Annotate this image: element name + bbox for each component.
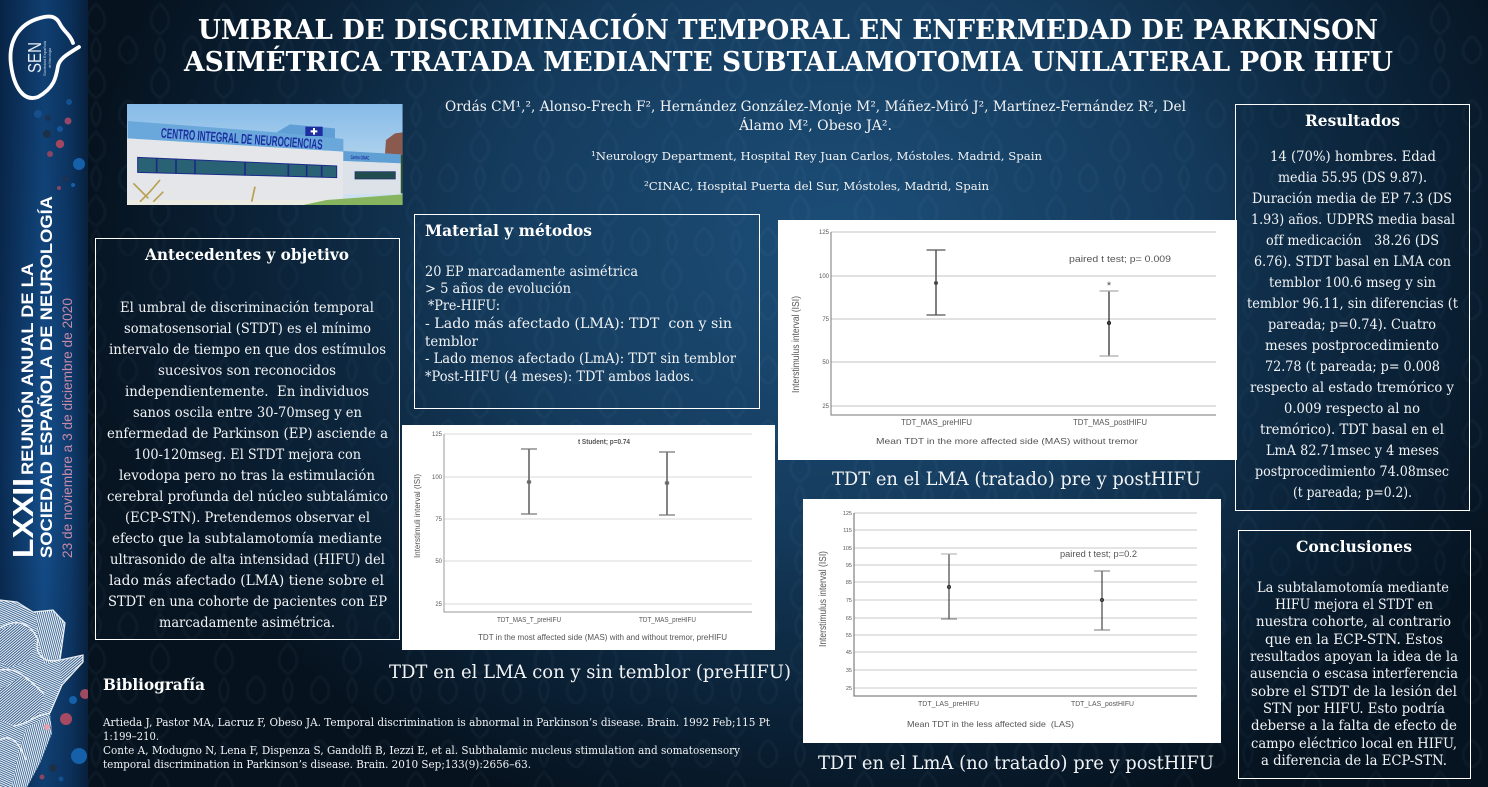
chart: TDT in less affected side: 25	[846, 686, 852, 692]
title	[183, 12, 1393, 78]
text block: references: Conte A, Modugno N, Lena F, Dispenza S, Gandolfi B, Iezzi E, et al. Subthalamic nucleus stimulation and somatosensory	[103, 743, 740, 757]
text block: conclusions: a diferencia de la ECP-STN.	[1261, 753, 1447, 769]
chart: TDT in most affected side with and without tremor: 25	[435, 602, 443, 608]
text block: results: off medicación 38.26 (DS	[1266, 233, 1439, 249]
congress title vertical: REUNIÓN ANUAL DE LA	[18, 263, 37, 475]
text block: methods: *Pre-HIFU:	[428, 298, 500, 314]
chart: TDT in less affected side: TDT_LAS_postHIFU	[1071, 699, 1134, 708]
text block: conclusions: que en la ECP-STN. Estos	[1265, 632, 1443, 648]
text block: results: postprocedimiento 74.08msec	[1255, 464, 1449, 480]
affiliations: ¹Neurology Department, Hospital Rey Juan Carlos, Móstoles. Madrid, Spain	[591, 149, 1043, 163]
chart: TDT in more affected side pre and post HIFU: 25	[822, 404, 830, 410]
chart: TDT in less affected side: 85	[846, 580, 852, 586]
error bar: postHIFU	[1100, 291, 1118, 356]
text block: conclusions	[1250, 580, 1458, 769]
icon: brain	[0, 600, 83, 787]
chart: TDT in most affected side with and without tremor: TDT_MAS_T_preHIFU	[497, 617, 561, 624]
text block: background	[107, 300, 388, 631]
icon: SEN logo: Sociedad Española	[42, 40, 47, 76]
chart: TDT in less affected side: paired t test; p=0.2	[1060, 549, 1137, 559]
text block: background: 100-120mseg. El STDT mejora con	[134, 447, 361, 463]
heading: Antecedentes y objetivo: Antecedentes y objetivo	[144, 245, 349, 264]
chart: TDT in less affected side	[803, 499, 1221, 743]
icon: SEN logo: de Neurología	[47, 47, 52, 68]
chart: TDT in more affected side pre and post HIFU: 125	[819, 230, 830, 236]
text block: methods	[425, 264, 737, 385]
chart: TDT in less affected side: 125	[843, 511, 852, 517]
text block: background: sucesivos son reconocidos	[158, 363, 336, 379]
text block: conclusions: ausencia o escasa interferencia	[1250, 666, 1458, 682]
chart: TDT in more affected side pre and post HIFU: Mean TDT in the more affected side (MAS) without tremor	[876, 436, 1138, 446]
chart: TDT in most affected side with and without tremor: TDT_MAS_preHIFU	[639, 617, 696, 624]
text block: background: El umbral de discriminación temporal	[120, 300, 374, 316]
text block: results: LmA 82.71msec y 4 meses	[1266, 443, 1439, 459]
chart: TDT in less affected side: 105	[843, 546, 852, 552]
chart: TDT in less affected side: Interstimulus interval (ISI)	[818, 551, 829, 647]
chart: TDT in more affected side pre and post HIFU	[778, 220, 1237, 460]
chart: TDT in more affected side pre and post HIFU: 75	[822, 317, 830, 323]
text block: background: independientemente. En individuos	[125, 384, 369, 400]
text block: methods: 20 EP marcadamente asimétrica	[425, 264, 638, 280]
text block: conclusions: campo eléctrico local en HIFU,	[1251, 736, 1457, 752]
text block: results	[1247, 149, 1459, 501]
network dots bottom	[40, 689, 90, 782]
chart: TDT in more affected side pre and post HIFU: 100	[819, 274, 830, 280]
chart: TDT in less affected side: 95	[846, 563, 852, 569]
chart: TDT in less affected side: 115	[843, 528, 852, 534]
text block: methods: > 5 años de evolución	[425, 281, 571, 297]
text block: results: 14 (70%) hombres. Edad	[1270, 149, 1436, 165]
text block: background: intervalo de tiempo en que dos estímulos	[109, 342, 386, 358]
chart: TDT in less affected side: TDT_LAS_preHIFU	[918, 699, 979, 708]
chart: TDT in more affected side pre and post HIFU: Interstimulus interval (ISI)	[791, 296, 802, 393]
text block: methods: - Lado menos afectado (LmA): TDT sin temblor	[425, 351, 737, 367]
text block: references: Artieda J, Pastor MA, Lacruz F, Obeso JA. Temporal discrimination is abnormal in Parkinson’s disease. Brain. 1992 Feb;115 Pt	[102, 715, 770, 729]
panel: Antecedentes y objetivo	[96, 238, 400, 640]
text block: results: Duración media de EP 7.3 (DS	[1252, 191, 1452, 207]
text block: conclusions: nuestra cohorte, al contrario	[1256, 614, 1451, 630]
text block: methods: - Lado más afectado (LMA): TDT con y sin	[425, 316, 732, 332]
chart: TDT in more affected side pre and post HIFU: paired t test; p= 0.009	[1069, 254, 1171, 265]
text block: results: 1.93) años. UDPRS media basal	[1251, 212, 1455, 228]
icon: SEN logo: SEN	[25, 42, 45, 73]
text block: conclusions: sobre el STDT de la lesión del	[1251, 684, 1457, 700]
text block: background: cerebral profunda del núcleo subtalámico	[107, 489, 388, 505]
bibliography	[102, 675, 770, 771]
text block: results: temblor 96.11, sin diferencias (t	[1247, 296, 1459, 312]
chart: TDT in most affected side with and without tremor: Interstimuli interval (ISI)	[413, 474, 422, 558]
congress title vertical: 23 de noviembre a 3 de diciembre de 2020	[59, 298, 75, 558]
chart: TDT in most affected side with and without tremor: 125	[432, 432, 443, 438]
text block: references: 1:199–210.	[103, 729, 159, 743]
chart: TDT in most affected side with and without tremor: 50	[435, 559, 443, 565]
heading: Resultados: Resultados	[1305, 111, 1400, 130]
photo: Centro Integral de Neurociencias building: Centro CINAC	[351, 155, 370, 162]
text block: references	[102, 715, 770, 771]
chart: TDT in most affected side with and without tremor: 100	[432, 475, 443, 481]
text block: results: temblor 100.6 mseg y sin	[1269, 275, 1436, 291]
icon: SEN logo	[10, 16, 79, 98]
chart: TDT in less affected side: 35	[846, 668, 852, 674]
chart caption: LMA treated: TDT en el LMA (tratado) pre y postHIFU	[832, 468, 1201, 490]
text block: results: pareada; p=0.74). Cuatro	[1268, 317, 1436, 333]
text block: background: STDT en una cohorte de pacientes con EP	[108, 594, 387, 610]
panel: Conclusiones	[1238, 530, 1470, 778]
chart: TDT in most affected side with and without tremor: t Student; p=0.74	[578, 439, 630, 446]
authors: Ordás CM¹,², Alonso-Frech F², Hernández González-Monje M², Máñez-Miró J², Martínez-Fernández R², Del	[445, 99, 1186, 115]
text block: conclusions: deberse a la falta de efecto de	[1251, 718, 1457, 734]
panel: Material y métodos	[414, 214, 760, 408]
photo: Centro Integral de Neurociencias building: CENTRO INTEGRAL DE NEUROCIENCIAS	[160, 125, 323, 152]
chart: TDT in most affected side with and without tremor	[402, 425, 775, 650]
chart caption: LMA with and without tremor: TDT en el LMA con y sin temblor (preHIFU)	[389, 661, 791, 683]
error bar: without tremor	[659, 452, 675, 515]
text block: results: tremórico). TDT basal en el	[1260, 422, 1444, 438]
text block: background: efecto que la subtalamotomía mediante	[112, 531, 382, 547]
error bar: preHIFU	[926, 250, 946, 315]
text block: results: media 55.95 (DS 9.87).	[1278, 170, 1427, 186]
heading: Conclusiones: Conclusiones	[1296, 537, 1412, 556]
sidebar	[0, 0, 90, 787]
text block: conclusions: HIFU mejora el STDT en	[1275, 597, 1433, 613]
error bar: preHIFU	[941, 554, 957, 619]
heading: Material y métodos: Material y métodos	[425, 221, 592, 240]
chart: TDT in more affected side pre and post HIFU: TDT_MAS_postHIFU	[1073, 418, 1147, 427]
chart: TDT in more affected side pre and post HIFU: *	[1107, 280, 1112, 292]
text block: methods: temblor	[425, 334, 479, 350]
text block: background: lado más afectado (LMA) tiene sobre el	[109, 573, 384, 589]
congress title vertical: SOCIEDAD ESPAÑOLA DE NEUROLOGÍA	[36, 196, 56, 558]
congress title vertical	[13, 196, 72, 558]
chart: TDT in less affected side: 45	[846, 650, 852, 656]
network dots top	[34, 99, 85, 190]
text block: results: respecto al estado tremórico y	[1250, 380, 1454, 396]
text block: background: (ECP-STN). Pretendemos observar el	[125, 510, 370, 526]
text block: conclusions: STN por HIFU. Esto podría	[1263, 701, 1445, 717]
heading: Bibliografía: Bibliografía	[103, 675, 205, 694]
text block: conclusions: resultados apoyan la idea de la	[1250, 649, 1458, 665]
affiliations	[591, 149, 1043, 193]
text block: references: temporal discrimination in Parkinson’s disease. Brain. 2010 Sep;133(9):2656–63.	[103, 757, 531, 771]
congress title vertical: LXXII	[8, 478, 40, 558]
authors: Álamo M², Obeso JA².	[738, 118, 892, 134]
chart: TDT in less affected side: 65	[846, 616, 852, 622]
affiliations: ²CINAC, Hospital Puerta del Sur, Móstoles, Madrid, Spain	[644, 179, 990, 193]
chart: TDT in more affected side pre and post HIFU: 50	[822, 360, 830, 366]
chart: TDT in less affected side: 75	[846, 598, 852, 604]
text block: results: meses postprocedimiento	[1265, 338, 1439, 354]
chart: TDT in most affected side with and without tremor: 75	[435, 517, 443, 523]
text block: results: 72.78 (t pareada; p= 0.008	[1265, 359, 1440, 375]
text block: results: 0.009 respecto al no	[1284, 401, 1420, 417]
text block: background: levodopa pero no tras la estimulación	[119, 468, 375, 484]
text block: methods: *Post-HIFU (4 meses): TDT ambos lados.	[425, 369, 694, 385]
text block: background: enfermedad de Parkinson (EP) asciende a	[107, 426, 388, 442]
chart: TDT in most affected side with and without tremor: TDT in the most affected side (MAS) with and without tremor, preHIFU	[478, 633, 727, 642]
text block: background: ultrasonido de alta intensidad (HIFU) del	[110, 552, 385, 568]
error bar: with tremor	[521, 449, 537, 514]
chart: TDT in more affected side pre and post HIFU: TDT_MAS_preHIFU	[901, 418, 972, 427]
photo: Centro Integral de Neurociencias building	[127, 104, 403, 205]
title: ASIMÉTRICA TRATADA MEDIANTE SUBTALAMOTOMIA UNILATERAL POR HIFU	[183, 45, 1393, 78]
authors	[445, 99, 1186, 134]
text block: conclusions: La subtalamotomía mediante	[1257, 580, 1449, 596]
chart caption: LmA untreated: TDT en el LmA (no tratado) pre y postHIFU	[818, 752, 1214, 774]
panel: Resultados	[1236, 104, 1470, 510]
text block: background: marcadamente asimétrica.	[159, 615, 335, 631]
text block: results: 6.76). STDT basal en LMA con	[1254, 254, 1451, 270]
text block: background: somatosensorial (STDT) es el mínimo	[124, 321, 371, 337]
title: UMBRAL DE DISCRIMINACIÓN TEMPORAL EN ENFERMEDAD DE PARKINSON	[198, 12, 1378, 46]
text block: background: sanos oscila entre 30-70mseg y en	[133, 405, 362, 421]
text block: results: (t pareada; p=0.2).	[1293, 485, 1412, 501]
chart: TDT in less affected side: Mean TDT in the less affected side (LAS)	[907, 719, 1074, 729]
error bar: postHIFU	[1094, 571, 1110, 630]
chart: TDT in less affected side: 55	[846, 633, 852, 639]
